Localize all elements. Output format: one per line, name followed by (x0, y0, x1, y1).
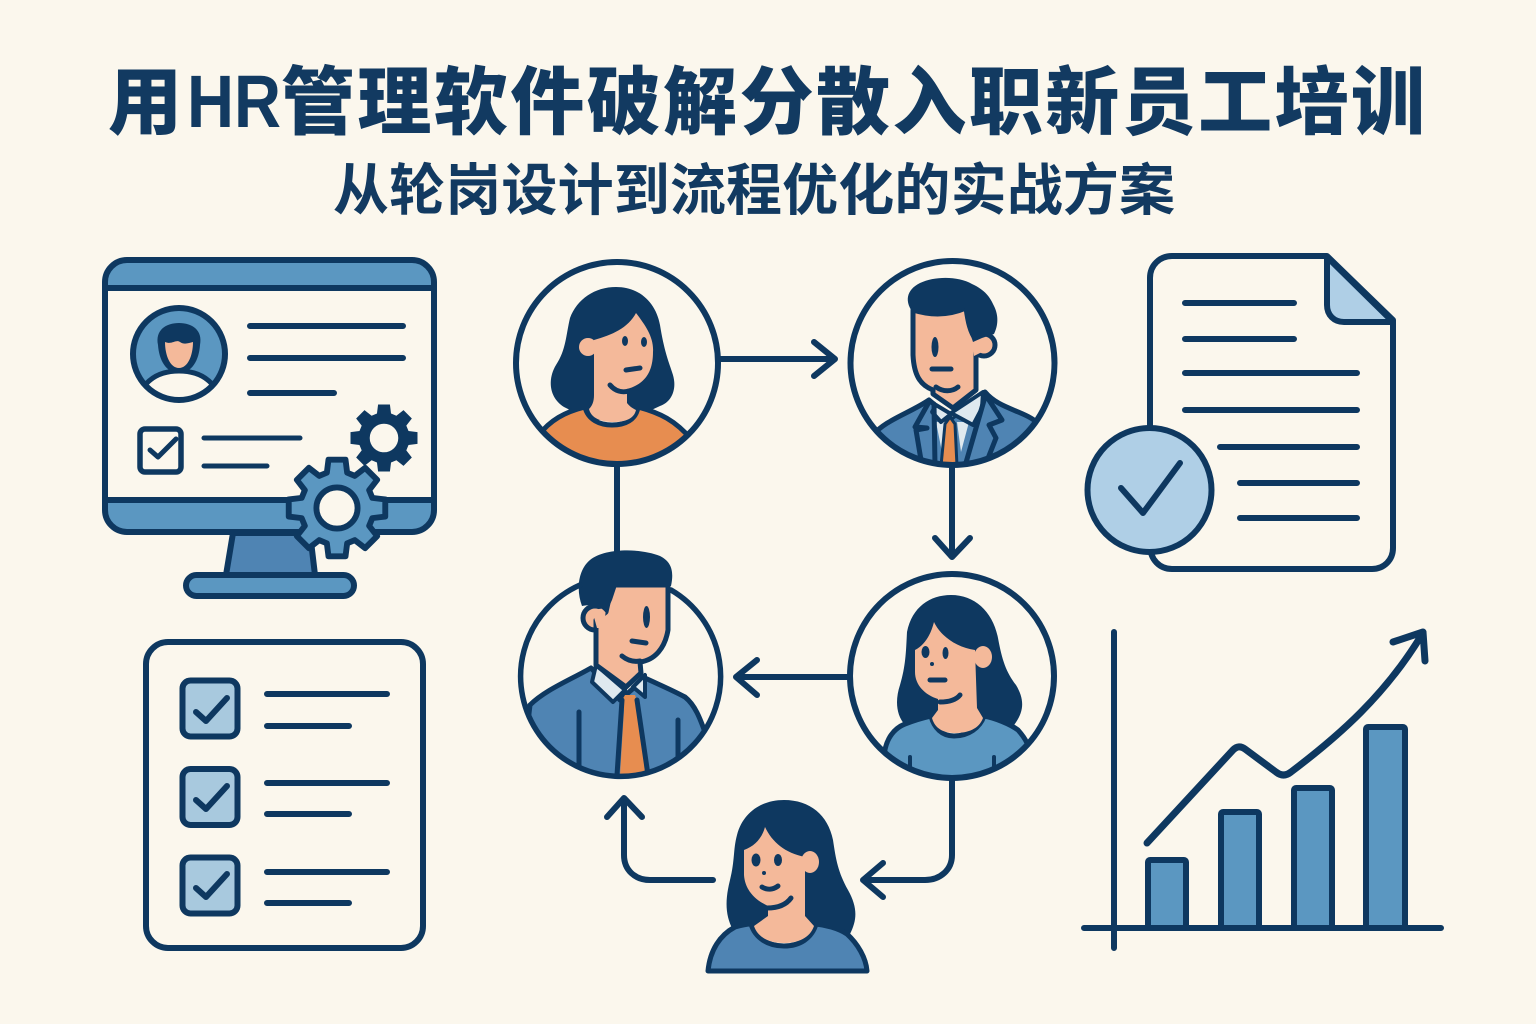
person 5: woman at bottom (708, 800, 867, 971)
person 3: man with tie (520, 550, 722, 790)
suit (877, 390, 1035, 462)
hair (727, 800, 855, 934)
shirt (708, 924, 867, 971)
profile text lines (250, 326, 403, 393)
title: 管理软件破解分散入职新员工培训 (281, 61, 1425, 144)
hair (908, 278, 997, 342)
circle outline (516, 262, 718, 464)
icon: small dark gear (351, 405, 417, 471)
title: 用 (108, 61, 182, 144)
trend arrow (1147, 632, 1425, 843)
person 4: woman in blue shirt (850, 574, 1054, 790)
avatar (133, 308, 225, 410)
circle outline (521, 585, 721, 776)
neck and face (913, 308, 995, 408)
icon: document with check badge (1088, 256, 1393, 569)
person 1: woman in orange (516, 262, 718, 480)
checklist item 1 (182, 680, 387, 736)
connector: person 3 to person 1 (614, 467, 620, 552)
folded corner (1327, 257, 1393, 322)
axes (1084, 632, 1441, 948)
document text lines (1185, 303, 1357, 518)
shirt (542, 409, 688, 461)
face (744, 827, 819, 943)
neck and face (583, 585, 668, 687)
hair (551, 287, 674, 420)
arrow: person 5 to person 3 (607, 798, 713, 880)
shirt and tie (528, 665, 705, 774)
arrow: person 4 to person 5 (863, 780, 952, 897)
bar chart with rising trend arrow (1084, 632, 1441, 948)
facial features (622, 606, 650, 661)
monitor frame (105, 260, 434, 532)
panel: checklist card (146, 642, 423, 948)
subtitle: 从轮岗设计到流程优化的实战方案 (333, 159, 1175, 222)
monitor base (186, 575, 354, 596)
icon: large blue gear (289, 460, 385, 556)
face (579, 313, 653, 422)
checklist item 2 (182, 769, 387, 825)
hair (579, 550, 672, 613)
circle outline (850, 574, 1054, 778)
facial features (932, 337, 958, 391)
title: HR (187, 60, 281, 143)
check badge (1088, 428, 1212, 552)
checklist item 3 (182, 858, 387, 914)
monitor stand (226, 533, 315, 575)
hair (897, 595, 1022, 725)
bars (1148, 727, 1405, 928)
arrow: person 1 to person 2 (720, 342, 835, 376)
arrow: person 4 to person 3 (736, 660, 848, 695)
document page (1150, 256, 1393, 569)
person 2: man in suit (850, 261, 1054, 480)
shirt (883, 719, 1028, 775)
checkbox text lines (204, 438, 300, 466)
arrow: person 2 to person 4 (935, 467, 970, 557)
circle outline (850, 261, 1054, 465)
checkbox (140, 429, 181, 472)
icon: computer monitor with HR profile and gears (105, 260, 434, 596)
face (915, 622, 992, 733)
